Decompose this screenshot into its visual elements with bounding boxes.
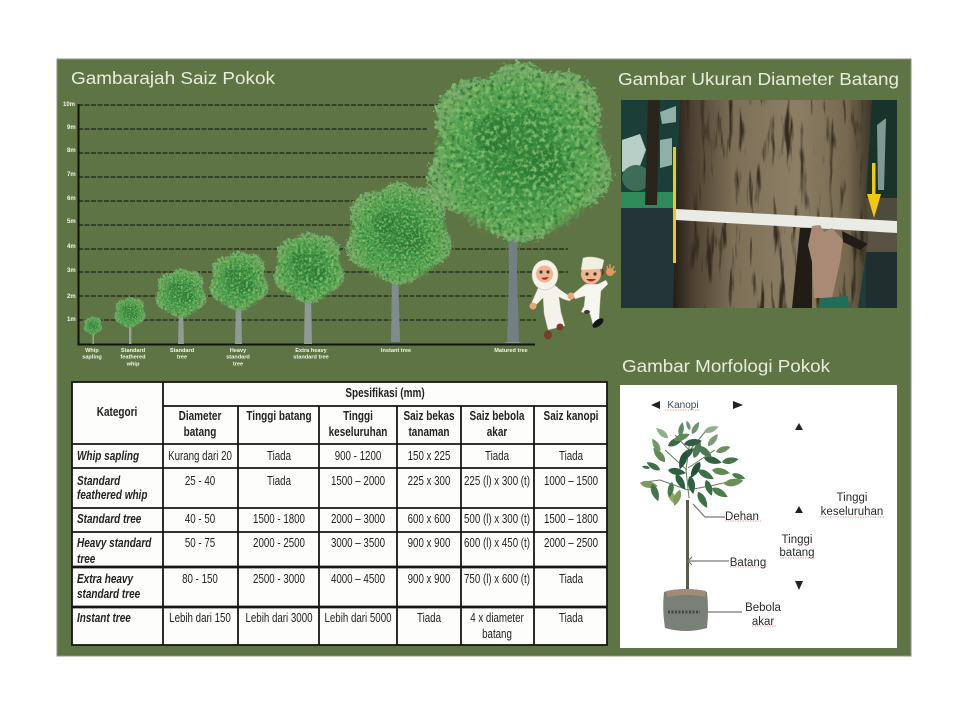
row: Standard feathered whip: 225 (l) x 300 (t) xyxy=(464,475,530,488)
row: Instant tree: Lebih dari 5000 xyxy=(324,612,392,625)
axis height labels: 4m xyxy=(67,244,76,250)
label: Tinggi batang: Tinggi xyxy=(782,534,812,546)
row: Standard tree: 1500 - 1800 xyxy=(253,513,305,526)
row: Instant tree xyxy=(77,612,584,641)
axis height labels: 10m xyxy=(63,102,75,108)
axis height labels: 9m xyxy=(67,125,76,131)
axis height labels: 5m xyxy=(67,219,76,225)
row: Extra heavy standard tree: Extra heavy xyxy=(77,573,134,586)
row: Extra heavy standard tree: 900 x 900 xyxy=(408,573,450,586)
axis height labels xyxy=(63,102,76,323)
row: Standard feathered whip xyxy=(77,475,598,502)
row: Heavy standard tree: 50 - 75 xyxy=(185,537,215,550)
tree captions: feathered xyxy=(120,354,146,360)
label: Tinggi keseluruhan: keseluruhan xyxy=(821,506,883,518)
row: Extra heavy standard tree: standard tree xyxy=(77,588,140,601)
row: Whip sapling xyxy=(77,450,584,463)
axis height labels: 1m xyxy=(67,317,76,323)
axes xyxy=(78,104,535,344)
row: Standard feathered whip: 1000 – 1500 xyxy=(544,475,598,488)
row: Standard tree: 2000 – 3000 xyxy=(331,513,385,526)
table header: Saiz bekas xyxy=(403,410,455,423)
row: Whip sapling: Whip sapling xyxy=(77,450,139,463)
pointer lines xyxy=(688,504,742,612)
table header: Spesifikasi (mm) xyxy=(345,387,425,400)
tree captions: Instant tree xyxy=(381,348,411,354)
axis height labels: 8m xyxy=(67,148,76,154)
row: Standard feathered whip: feathered whip xyxy=(77,489,148,502)
row: Instant tree: batang xyxy=(482,628,512,641)
row: Standard tree: 500 (l) x 300 (t) xyxy=(464,513,530,526)
table header: akar xyxy=(487,426,508,439)
row: Heavy standard tree: tree xyxy=(77,553,95,566)
row: Standard feathered whip: 225 x 300 xyxy=(408,475,450,488)
label: Bebola akar: akar xyxy=(752,616,774,628)
row: Heavy standard tree: 2000 – 2500 xyxy=(544,537,598,550)
row: Standard tree xyxy=(77,513,598,526)
panel: green background xyxy=(57,59,911,656)
row: Instant tree: Tiada xyxy=(417,612,442,625)
arrows xyxy=(651,401,803,590)
tree captions: sapling xyxy=(82,354,102,360)
tree: whip sapling xyxy=(84,316,102,344)
tree: heavy standard tree xyxy=(210,251,268,344)
row: Extra heavy standard tree: 80 - 150 xyxy=(182,573,218,586)
title: Gambar Morfologi Pokok: Gambar Morfologi Pokok xyxy=(622,356,830,376)
row: Standard tree: 600 x 600 xyxy=(408,513,450,526)
root ball xyxy=(663,589,708,631)
tree: standard feathered whip xyxy=(114,297,146,344)
table header: Tinggi batang xyxy=(246,410,312,423)
row: Standard feathered whip: Standard xyxy=(77,475,121,488)
row: Heavy standard tree: 900 x 900 xyxy=(408,537,450,550)
label: Tinggi batang xyxy=(779,534,815,559)
tree captions: Matured tree xyxy=(494,348,528,354)
row: Instant tree: Lebih dari 150 xyxy=(169,612,231,625)
table header: Diameter xyxy=(179,410,222,423)
table header: Saiz kanopi xyxy=(544,410,598,423)
plant canopy leaves xyxy=(639,420,746,509)
table header: batang xyxy=(184,426,216,439)
row: Extra heavy standard tree: 2500 - 3000 xyxy=(253,573,305,586)
row: Heavy standard tree: Heavy standard xyxy=(77,537,152,550)
tree captions: standard tree xyxy=(293,354,329,360)
axis height labels: 3m xyxy=(67,268,76,274)
row: Standard feathered whip: Tiada xyxy=(267,475,292,488)
row: Instant tree: 4 x diameter xyxy=(470,612,524,625)
tree: standard tree xyxy=(156,268,206,344)
row: Standard tree: 40 - 50 xyxy=(185,513,215,526)
plant trunk xyxy=(686,500,689,589)
title: Gambar Ukuran Diameter Batang: Gambar Ukuran Diameter Batang xyxy=(618,69,899,89)
row: Instant tree: Lebih dari 3000 xyxy=(245,612,313,625)
row: Extra heavy standard tree: 4000 – 4500 xyxy=(331,573,385,586)
photo trunk xyxy=(673,100,872,308)
tree captions: tree xyxy=(233,362,243,368)
table header: Saiz bebola xyxy=(470,410,525,423)
tree captions: Heavy xyxy=(230,348,247,354)
row: Whip sapling: Kurang dari 20 xyxy=(168,450,232,463)
row: Instant tree: Instant tree xyxy=(77,612,131,625)
table header: tanaman xyxy=(408,426,450,439)
panel: tree morphology xyxy=(620,385,897,648)
table header xyxy=(97,387,598,439)
row: Whip sapling: 150 x 225 xyxy=(408,450,450,463)
measuring tape xyxy=(676,209,897,233)
row: Whip sapling: Tiada xyxy=(559,450,584,463)
yellow arrow xyxy=(867,163,881,218)
row: Standard tree: Standard tree xyxy=(77,513,141,526)
table background xyxy=(72,382,607,645)
tree captions: tree xyxy=(177,354,187,360)
white background xyxy=(620,385,897,648)
label: Batang: Batang xyxy=(730,557,766,569)
tree captions: standard xyxy=(226,354,250,360)
row: Heavy standard tree: 2000 - 2500 xyxy=(253,537,305,550)
girl xyxy=(530,260,574,340)
row: Extra heavy standard tree: Tiada xyxy=(559,573,584,586)
tree: matured tree xyxy=(428,62,612,343)
table header: Tinggi xyxy=(343,410,373,423)
row: Heavy standard tree xyxy=(77,537,598,566)
label: Tinggi batang: batang xyxy=(779,547,815,559)
label: Tinggi keseluruhan: Tinggi xyxy=(837,492,867,504)
photo: measuring trunk diameter xyxy=(621,100,897,308)
label: Tinggi keseluruhan xyxy=(820,492,884,518)
tree captions: Whip xyxy=(85,348,99,354)
axis height labels: 7m xyxy=(67,172,76,178)
tree: extra heavy standard tree xyxy=(274,232,344,344)
row: Standard feathered whip: 1500 – 2000 xyxy=(331,475,385,488)
title: Gambarajah Saiz Pokok: Gambarajah Saiz Pokok xyxy=(71,68,275,88)
axis height labels: 2m xyxy=(67,294,76,300)
label: Dehan: Dehan xyxy=(725,511,759,523)
label: Kanopi: Kanopi xyxy=(667,400,699,411)
photo background forest xyxy=(621,100,897,308)
table header: keseluruhan xyxy=(329,426,387,439)
chart: tree size scale xyxy=(63,62,612,367)
row: Heavy standard tree: 3000 – 3500 xyxy=(331,537,385,550)
row: Extra heavy standard tree xyxy=(77,573,584,601)
table grid xyxy=(72,382,607,645)
label: Bebola akar xyxy=(745,602,782,628)
row: Whip sapling: Tiada xyxy=(485,450,510,463)
row: Heavy standard tree: 600 (l) x 450 (t) xyxy=(464,537,530,550)
row: Instant tree: Tiada xyxy=(559,612,584,625)
tree captions xyxy=(82,348,528,368)
tree captions: Standard xyxy=(121,348,146,354)
row: Extra heavy standard tree: 750 (l) x 600 (t) xyxy=(464,573,530,586)
illustration: two children holding hands xyxy=(530,257,616,340)
label: Bebola akar: Bebola xyxy=(745,602,782,614)
hand with shadow xyxy=(792,225,868,308)
table: tree specifications xyxy=(72,382,607,645)
row: Standard tree: 1500 – 1800 xyxy=(544,513,598,526)
tree captions: whip xyxy=(126,362,140,368)
row: Whip sapling: 900 - 1200 xyxy=(335,450,381,463)
tree: instant tree xyxy=(346,182,452,342)
table header: Kategori xyxy=(97,406,137,419)
axis height labels: 6m xyxy=(67,196,76,202)
boy xyxy=(573,257,616,330)
row: Standard feathered whip: 25 - 40 xyxy=(185,475,215,488)
tree captions: Extra heavy xyxy=(295,348,328,354)
tree captions: Standard xyxy=(170,348,195,354)
yellow marker line xyxy=(673,147,676,263)
height gridlines xyxy=(78,105,568,320)
row: Whip sapling: Tiada xyxy=(267,450,292,463)
